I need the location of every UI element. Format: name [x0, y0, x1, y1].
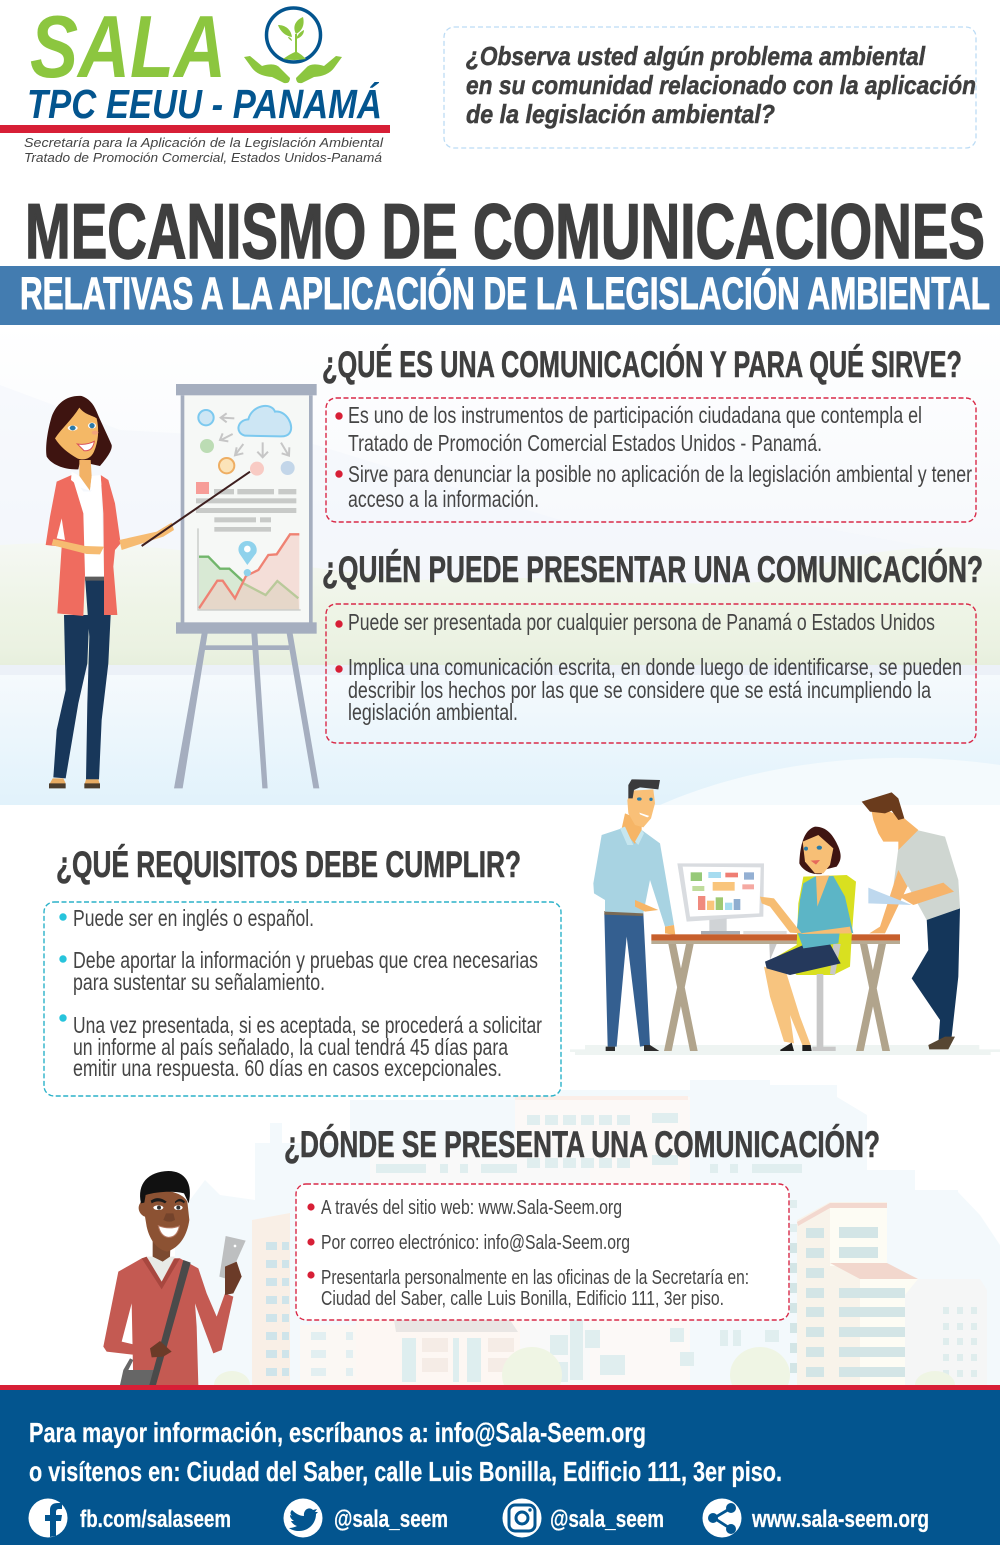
heading: requisitos: ¿QUÉ REQUISITOS DEBE CUMPLIR? [56, 844, 521, 885]
background: city skyline [175, 1080, 1000, 1403]
icon: twitter [284, 1498, 322, 1538]
logo subtitle: TPC EEUU - PANAMÁ: TPC EEUU - PANAMÁ [27, 81, 382, 127]
panel: requisitos: Debe aportar la información y pruebas que crea necesarias [73, 947, 538, 973]
callout: question about environmental problem [444, 27, 976, 148]
icon: facebook [28, 1498, 68, 1538]
background: landscape [0, 325, 1000, 805]
sub-element: standing man [593, 779, 675, 1051]
panel: requisitos: un informe al país señalado, la cual tendrá 45 días para [73, 1034, 508, 1060]
sub-element: seated woman [760, 827, 856, 1051]
panel: dónde: Por correo electrónico: info@Sala-Seem.org [321, 1232, 630, 1254]
twitter handle: @sala_seem [334, 1506, 448, 1533]
panel: qué es: Tratado de Promoción Comercial Estados Unidos - Panamá. [348, 430, 822, 456]
illustration: team at desk [570, 779, 1000, 1055]
panel: qué es [326, 398, 976, 522]
panel: quién [326, 604, 976, 743]
instagram handle: @sala_seem [550, 1506, 664, 1533]
illustration: flip chart easel [174, 384, 319, 788]
panel: dónde: Presentarla personalmente en las oficinas de la Secretaría en: [321, 1267, 749, 1289]
panel: requisitos: para sustentar su señalamiento. [73, 969, 325, 995]
facebook handle: fb.com/salaseem [80, 1506, 231, 1533]
logo caption lines: Secretaría para la Aplicación de la Legislación Ambiental [24, 135, 384, 150]
footer [0, 1385, 1000, 1545]
panel: dónde: A través del sitio web: www.Sala-Seem.org [321, 1197, 622, 1219]
logo red bar [0, 125, 390, 133]
panel: requisitos: Una vez presentada, si es aceptada, se procederá a solicitar [73, 1012, 542, 1038]
logo icon: plant in circle with hands [244, 8, 342, 83]
illustration: woman presenter [46, 396, 250, 788]
illustration: man with phone [103, 1171, 246, 1385]
footer contact lines [29, 1417, 782, 1487]
panel: dónde [296, 1184, 789, 1320]
callout: question about environmental problem: ¿Observa usted algún problema ambiental [466, 41, 926, 71]
callout: question about environmental problem: de la legislación ambiental? [466, 99, 775, 129]
logo caption lines [24, 135, 384, 165]
panel: requisitos: emitir una respuesta. 60 días en casos excepcionales. [73, 1055, 502, 1081]
sub-element: desk and monitor [651, 863, 900, 1051]
panel: requisitos [44, 902, 561, 1096]
icon: share [702, 1498, 742, 1538]
panel: quién: legislación ambiental. [348, 699, 518, 725]
sub-element: standing man with paper [862, 792, 960, 1049]
panel: qué es: acceso a la información. [348, 486, 539, 512]
icon: instagram [502, 1498, 542, 1538]
website: www.sala-seem.org [751, 1506, 929, 1533]
panel: dónde: Ciudad del Saber, calle Luis Bonilla, Edificio 111, 3er piso. [321, 1288, 724, 1310]
logo caption lines: Tratado de Promoción Comercial, Estados Unidos-Panamá [24, 150, 382, 165]
footer contact lines: o visítenos en: Ciudad del Saber, calle Luis Bonilla, Edificio 111, 3er piso. [29, 1456, 782, 1487]
logo: SALA TPC EEUU - Panamá [0, 0, 390, 165]
footer contact lines: Para mayor información, escríbanos a: info@Sala-Seem.org [29, 1417, 646, 1448]
panel: requisitos: Puede ser en inglés o español. [73, 905, 314, 931]
